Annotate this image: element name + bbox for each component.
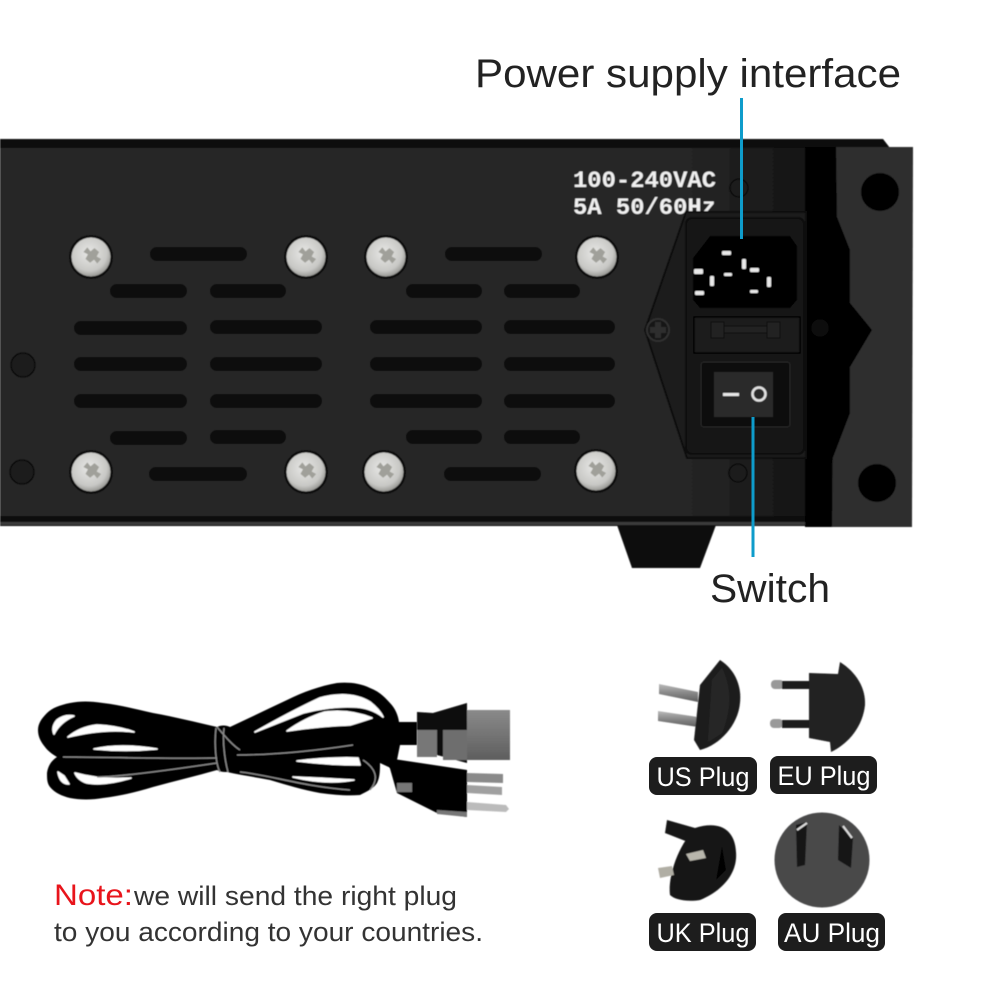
vent slots: right group xyxy=(370,247,615,481)
connector: US mains plug xyxy=(387,758,509,817)
callout line: power supply interface xyxy=(740,98,743,239)
fuse holder xyxy=(694,317,800,353)
label: US Plug: US Plug xyxy=(656,762,750,792)
rocker switch xyxy=(701,362,790,427)
plug: EU xyxy=(770,662,865,752)
foot xyxy=(617,525,716,568)
callout line: switch xyxy=(752,417,754,557)
cord highlights xyxy=(63,727,375,790)
vent slots: left group xyxy=(74,247,322,481)
label: EU Plug: EU Plug xyxy=(778,761,870,791)
note text: we will send the right plug xyxy=(133,881,457,911)
device rear panel xyxy=(0,139,913,568)
note text: to you according to your countries. xyxy=(54,917,483,947)
label: switch: Switch xyxy=(710,567,830,611)
power inlet module xyxy=(645,212,806,458)
note text xyxy=(54,879,483,947)
voltage label xyxy=(573,168,716,221)
cord silhouette xyxy=(38,683,417,800)
voltage label: 5A 50/60Hz xyxy=(573,195,716,221)
plug: AU xyxy=(774,812,870,908)
black panel screws xyxy=(10,179,828,484)
label: UK Plug: UK Plug xyxy=(656,918,750,948)
plug: US xyxy=(658,660,740,750)
connector: C13 xyxy=(417,703,510,763)
panel: chassis face xyxy=(0,148,806,516)
silver screws xyxy=(69,235,619,494)
power cord xyxy=(38,683,417,800)
voltage label: 100-240VAC xyxy=(573,168,716,194)
mounting ear xyxy=(805,147,913,527)
plug: UK xyxy=(658,820,736,901)
cord gaps xyxy=(53,695,383,784)
panel screw xyxy=(647,319,669,341)
label: AU Plug: AU Plug xyxy=(784,918,880,948)
IEC socket xyxy=(693,236,797,308)
title: power supply interface: Power supply interface xyxy=(475,52,901,96)
note text: Note: xyxy=(54,879,133,912)
